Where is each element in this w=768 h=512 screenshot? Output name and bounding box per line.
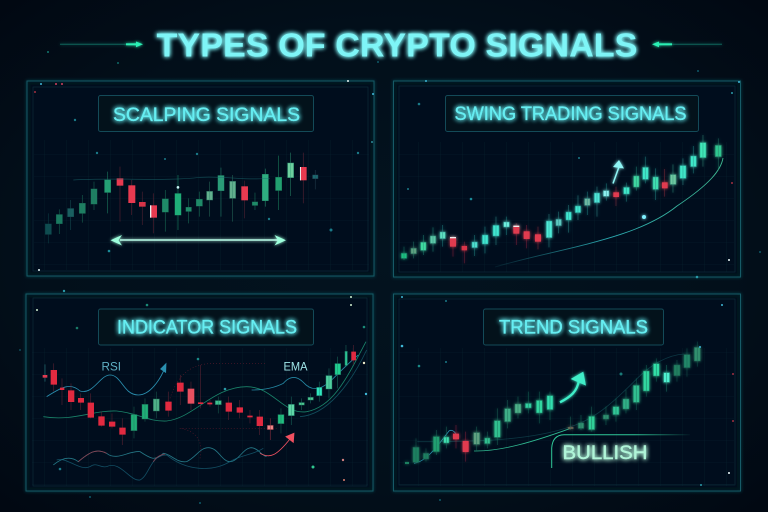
curves: trend bbox=[414, 354, 684, 463]
bullish badge bbox=[552, 435, 690, 468]
label box: swing trading signals bbox=[446, 96, 698, 132]
bullish badge: BULLISH bbox=[562, 443, 648, 464]
label box: trend signals bbox=[484, 309, 664, 345]
title bbox=[60, 26, 722, 64]
panel: indicator signals bbox=[26, 290, 373, 491]
label box: scalping signals bbox=[98, 96, 314, 132]
growth curve: swing bbox=[495, 158, 723, 267]
particles: indicator bbox=[36, 290, 367, 481]
panel: trend signals bbox=[394, 294, 740, 491]
candlestick chart: trend bbox=[405, 342, 700, 464]
arrow: title left bbox=[60, 42, 143, 47]
heading: types of crypto signals: TYPES OF CRYPTO SIGNALS bbox=[156, 26, 638, 64]
label: EMA: EMA bbox=[284, 362, 308, 374]
particles: scalping bbox=[34, 80, 374, 271]
arrow: title right bbox=[652, 42, 722, 47]
panel: swing trading signals bbox=[394, 80, 740, 278]
arrow: swing up bbox=[613, 160, 624, 184]
label box: swing trading signals: SWING TRADING SIGNALS bbox=[454, 103, 687, 125]
arrow: double headed range bbox=[110, 235, 286, 246]
label box: indicator signals bbox=[98, 309, 314, 345]
label box: trend signals: TREND SIGNALS bbox=[499, 316, 648, 338]
arrow: trend up bbox=[560, 372, 586, 402]
curves: RSI, EMA and oscillators bbox=[43, 342, 367, 480]
panel: scalping signals bbox=[27, 80, 374, 276]
particles: swing bbox=[407, 80, 740, 278]
particles: trend bbox=[401, 296, 734, 486]
label box: indicator signals: INDICATOR SIGNALS bbox=[117, 316, 297, 338]
candlestick chart: indicator bbox=[43, 345, 356, 445]
label box: scalping signals: SCALPING SIGNALS bbox=[113, 104, 300, 126]
candlestick chart: swing bbox=[401, 135, 721, 263]
candlestick chart: scalping bbox=[45, 153, 318, 243]
label: RSI: RSI bbox=[102, 362, 121, 374]
